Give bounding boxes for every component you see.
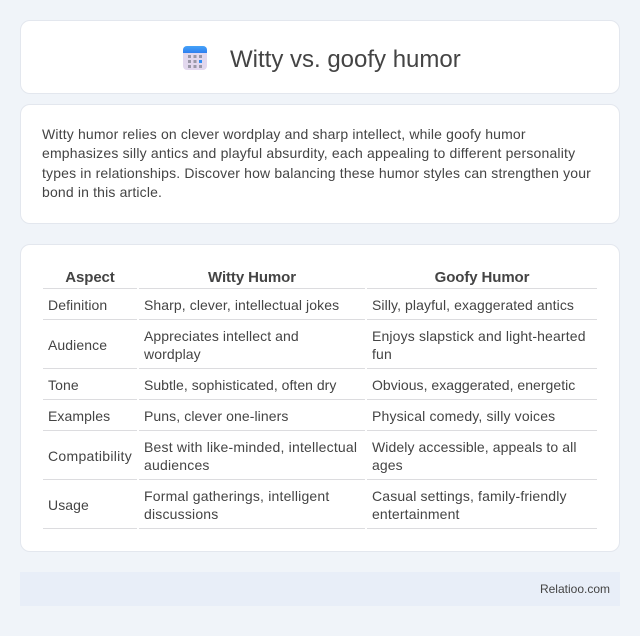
icon: calendar [183, 46, 207, 70]
row: definition: Definition [48, 297, 107, 313]
row: compatibility: Compatibility [48, 448, 132, 464]
row: audience: Appreciates intellect and [144, 328, 299, 344]
row: usage: entertainment [372, 506, 460, 522]
row: definition: Sharp, clever, intellectual jokes [144, 297, 339, 313]
table header: Aspect [65, 269, 115, 286]
table header: Goofy Humor [435, 269, 529, 286]
row: compatibility: ages [372, 457, 403, 473]
table header [43, 269, 597, 289]
footer bar [20, 572, 620, 606]
intro paragraph: Witty humor relies on clever wordplay and sharp intellect, while goofy humor [42, 126, 526, 142]
row: usage: discussions [144, 506, 218, 522]
intro paragraph: types in relationships. Discover how balancing these humor styles can strengthen your [42, 165, 591, 181]
row: tone [43, 377, 597, 400]
row: audience: fun [372, 346, 392, 362]
row: audience: Audience [48, 337, 107, 353]
row: usage: Casual settings, family-friendly [372, 488, 567, 504]
row: audience [43, 328, 597, 369]
intro paragraph [42, 126, 591, 200]
row: usage: Formal gatherings, intelligent [144, 488, 329, 504]
row: examples: Physical comedy, silly voices [372, 408, 555, 424]
row: audience: Enjoys slapstick and light-hearted [372, 328, 586, 344]
row: definition: Silly, playful, exaggerated antics [372, 297, 574, 313]
panel: intro text [20, 104, 620, 224]
footer credit: Relatioo.com [540, 582, 610, 596]
row: examples: Puns, clever one-liners [144, 408, 288, 424]
row: tone: Subtle, sophisticated, often dry [144, 377, 336, 393]
row: tone: Obvious, exaggerated, energetic [372, 377, 575, 393]
table header: Witty Humor [208, 269, 296, 286]
row: definition [43, 297, 597, 320]
row: audience: wordplay [144, 346, 201, 362]
row: compatibility: Best with like-minded, intellectual [144, 439, 357, 455]
row: compatibility [43, 439, 597, 480]
intro paragraph: emphasizes silly antics and playful absurdity, each appealing to different personality [42, 145, 575, 161]
row: compatibility: audiences [144, 457, 210, 473]
panel: title card [20, 20, 620, 94]
intro paragraph: bond in this article. [42, 184, 162, 200]
row: examples [43, 408, 597, 431]
row: examples: Examples [48, 408, 110, 424]
row: usage: Usage [48, 497, 89, 513]
row: tone: Tone [48, 377, 79, 393]
row: usage [43, 488, 597, 529]
row: compatibility: Widely accessible, appeals to all [372, 439, 577, 455]
panel: comparison table [20, 244, 620, 552]
title: Witty vs. goofy humor [230, 46, 461, 73]
